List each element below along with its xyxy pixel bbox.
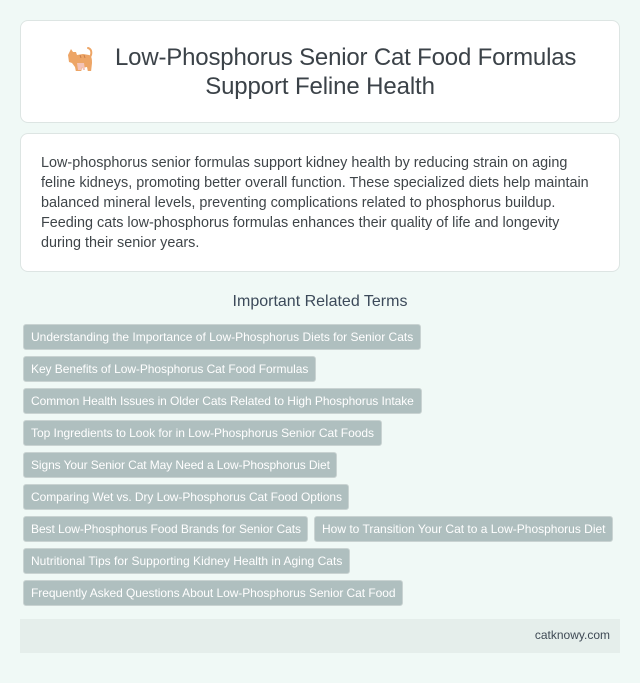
tag 7: Best Low-Phosphorus Food Brands for Senior Cats: [31, 522, 301, 536]
footer bar: catknowy.com: [535, 628, 610, 642]
tag 2: Key Benefits of Low-Phosphorus Cat Food Formulas: [31, 362, 308, 376]
summary text: Low-phosphorus senior formulas support kidney health by reducing strain on aging: [41, 155, 567, 171]
tag 7: [23, 516, 308, 542]
tag 2: [23, 356, 316, 382]
tag 8: How to Transition Your Cat to a Low-Phosphorus Diet: [322, 522, 606, 536]
tag 4: [23, 420, 382, 446]
tag 6: [23, 484, 349, 510]
tag 3: Common Health Issues in Older Cats Related to High Phosphorus Intake: [31, 394, 414, 408]
icon: cat: [68, 47, 92, 71]
title card: [20, 20, 620, 123]
summary text: Feeding cats low-phosphorus formulas enhances their quality of life and longevity: [41, 215, 559, 231]
title line 2: Support Feline Health: [205, 73, 435, 100]
title line 1: Low-Phosphorus Senior Cat Food Formulas: [115, 44, 576, 71]
summary text: [41, 155, 589, 251]
related terms heading: Important Related Terms: [233, 293, 407, 310]
tag 5: [23, 452, 337, 478]
tag 8: [314, 516, 613, 542]
tag 5: Signs Your Senior Cat May Need a Low-Phosphorus Diet: [31, 458, 330, 472]
summary text: during their senior years.: [41, 235, 199, 251]
tag 1: [23, 324, 421, 350]
tag 9: [23, 548, 350, 574]
summary text: balanced mineral levels, preventing complications related to phosphorus buildup.: [41, 195, 555, 211]
tag 10: Frequently Asked Questions About Low-Phosphorus Senior Cat Food: [31, 586, 395, 600]
summary text: feline kidneys, promoting better overall function. These specialized diets help maintain: [41, 175, 589, 191]
tag 4: Top Ingredients to Look for in Low-Phosphorus Senior Cat Foods: [31, 426, 374, 440]
tag 3: [23, 388, 422, 414]
tag 10: [23, 580, 403, 606]
tag 6: Comparing Wet vs. Dry Low-Phosphorus Cat Food Options: [31, 490, 342, 504]
footer bar: [20, 619, 620, 653]
tag 1: Understanding the Importance of Low-Phosphorus Diets for Senior Cats: [31, 330, 413, 344]
summary card: [20, 133, 620, 272]
tag 9: Nutritional Tips for Supporting Kidney Health in Aging Cats: [31, 554, 342, 568]
